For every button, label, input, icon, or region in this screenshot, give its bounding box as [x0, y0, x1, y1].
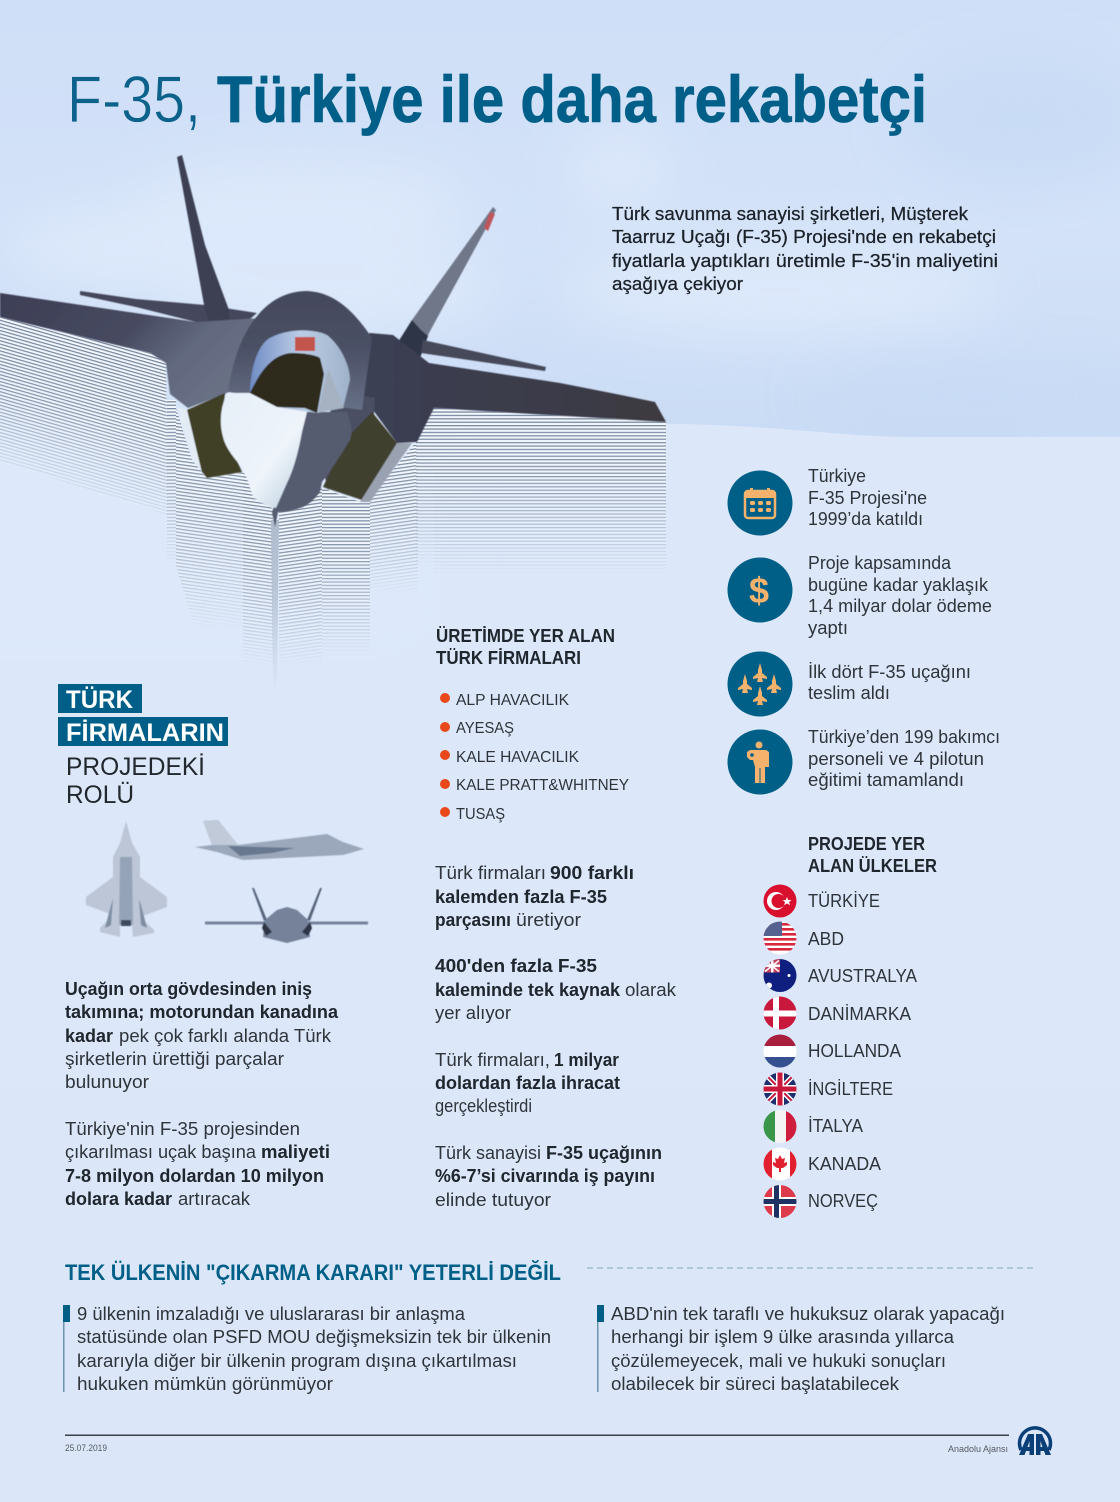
bottom right note: çözülemeyecek, mali ve hukuki sonuçları [611, 1351, 946, 1371]
left body text: şirketlerin ürettiği parçalar [65, 1049, 284, 1069]
pilot helmet red [295, 337, 315, 351]
intro paragraph: aşağıya çekiyor [612, 274, 743, 294]
middle body text [435, 863, 677, 1210]
left stabilizer [80, 291, 257, 323]
middle body text: Türk firmaları, [435, 1050, 550, 1070]
countries heading: PROJEDE YER [808, 834, 925, 854]
middle body text: kaleminde tek kaynak [435, 980, 621, 1000]
fact: payment: yaptı [808, 618, 848, 638]
icon: pilot [728, 730, 792, 794]
title: F-35, [67, 62, 201, 136]
icon: four jets [728, 652, 792, 716]
countries list: KANADA [808, 1154, 881, 1174]
middle body text: %6-7’si civarında iş payını [435, 1166, 655, 1186]
middle body text: 400'den fazla F-35 [435, 956, 597, 976]
flag: Turkey [763, 884, 797, 918]
right intake [323, 412, 397, 502]
companies list [436, 626, 629, 823]
bottom right note: ABD'nin tek taraflı ve hukuksuz olarak yapacağı [611, 1304, 1005, 1324]
middle body text: olarak [625, 980, 677, 1000]
fact: delivered: İlk dört F-35 uçağını [808, 662, 971, 682]
intro paragraph [612, 204, 998, 294]
companies items: KALE HAVACILIK [456, 749, 579, 766]
left body text [65, 979, 339, 1209]
fuselage underlay [316, 392, 375, 490]
bottom right note [597, 1304, 1005, 1394]
jet three views [86, 820, 368, 943]
section heading: role of Turkish companies: TÜRK [66, 685, 133, 714]
left body text: bulunuyor [65, 1072, 149, 1092]
top view [86, 821, 167, 937]
side view [195, 820, 364, 860]
fact: training: eğitimi tamamlandı [808, 770, 964, 790]
countries heading: ALAN ÜLKELER [808, 856, 937, 876]
left body text: çıkarılması uçak başına [65, 1142, 257, 1162]
right wing [345, 333, 666, 443]
jet speed line trails [0, 317, 666, 690]
middle body text: 900 farklı [550, 863, 634, 883]
countries list: İNGİLTERE [808, 1079, 893, 1099]
icon: dollar [728, 558, 792, 622]
left body text: 7-8 milyon dolardan 10 milyon [65, 1166, 324, 1186]
left body text: dolara kadar [65, 1189, 172, 1209]
left body text: artıracak [178, 1189, 251, 1209]
flag: Netherlands [763, 1034, 797, 1068]
intro paragraph: Türk savunma sanayisi şirketleri, Müşterek [612, 204, 969, 224]
middle body text: Türk sanayisi [435, 1143, 541, 1163]
bottom left note [63, 1304, 551, 1394]
right tail fin [395, 207, 496, 358]
flag: Norway [763, 1184, 797, 1218]
canopy dark glass [250, 353, 324, 413]
flag: Italy [763, 1110, 797, 1144]
title: Türkiye ile daha rekabetçi [217, 62, 927, 136]
section heading: role of Turkish companies: FİRMALARIN [66, 719, 224, 747]
fact: training: Türkiye’den 199 bakımcı [808, 727, 1000, 747]
companies heading: ÜRETİMDE YER ALAN [436, 626, 615, 646]
fact: joined in 1999: Türkiye [808, 466, 866, 486]
fact: delivered: teslim aldı [808, 683, 890, 703]
section heading: role of Turkish companies: ROLÜ [66, 781, 134, 809]
companies items: KALE PRATT&WHITNEY [456, 777, 629, 794]
middle body text: F-35 uçağının [546, 1143, 662, 1163]
icon: Anadolu Agency logo [1019, 1428, 1051, 1455]
fact list with icons [728, 466, 1000, 794]
middle body text: parçasını [435, 910, 511, 930]
left wing [0, 293, 285, 408]
companies items: ALP HAVACILIK [456, 692, 569, 709]
section heading: role of Turkish companies: PROJEDEKİ [66, 752, 205, 781]
icon: dollar: $ [749, 570, 769, 611]
canopy [250, 330, 350, 413]
bottom right note: herhangi bir işlem 9 ülke arasında yıllarca [611, 1327, 955, 1347]
fact: payment: bugüne kadar yaklaşık [808, 575, 989, 595]
middle body text: 1 milyar [554, 1050, 619, 1070]
countries heading [808, 834, 937, 876]
companies items: TUSAŞ [456, 806, 505, 823]
fact: training: personeli ve 4 pilotun [808, 749, 984, 769]
bottom left note: hukuken mümkün görünmüyor [77, 1374, 333, 1394]
left body text: maliyeti [261, 1142, 330, 1162]
companies heading [436, 626, 615, 668]
companies items: AYESAŞ [456, 720, 514, 737]
icon: calendar [728, 470, 792, 536]
middle body text: yer alıyor [435, 1003, 511, 1023]
countries list: ABD [808, 929, 844, 949]
left tail fin [177, 155, 229, 327]
flag: UK [763, 1072, 797, 1106]
jet photo illustration [0, 155, 666, 527]
companies heading: TÜRK FİRMALARI [436, 648, 581, 668]
left body text: Uçağın orta gövdesinden iniş [65, 979, 312, 999]
countries list: DANİMARKA [808, 1004, 911, 1024]
countries list: NORVEÇ [808, 1191, 878, 1211]
fact: joined in 1999: F-35 Projesi'ne [808, 488, 927, 508]
countries list: HOLLANDA [808, 1041, 901, 1061]
flag: Denmark [763, 996, 797, 1030]
fuselage dome [228, 291, 372, 410]
bottom section heading: TEK ÜLKENİN "ÇIKARMA KARARI" YETERLİ DEĞİL [65, 1260, 561, 1285]
bottom left note: 9 ülkenin imzaladığı ve uluslararası bir anlaşma [77, 1304, 466, 1324]
fact: payment [808, 553, 992, 638]
fact: delivered [808, 662, 971, 703]
countries list: İTALYA [808, 1116, 863, 1136]
footer: Anadolu Ajansı [948, 1444, 1008, 1454]
fact: joined in 1999: 1999’da katıldı [808, 509, 923, 529]
flag: USA [763, 921, 797, 955]
middle body text: kalemden fazla F-35 [435, 887, 607, 907]
left body text: kadar [65, 1026, 113, 1046]
left body text: pek çok farklı alanda Türk [119, 1026, 332, 1046]
intro paragraph: fiyatlarla yaptıkları üretimle F-35'in maliyetini [612, 251, 998, 271]
countries list: AVUSTRALYA [808, 966, 917, 986]
footer: 25.07.2019 [65, 1443, 107, 1453]
fact: training [808, 727, 1000, 790]
left body text: Türkiye'nin F-35 projesinden [65, 1119, 300, 1139]
footer [65, 1428, 1051, 1455]
flag: Australia [763, 958, 797, 992]
countries list [763, 834, 937, 1218]
middle body text: elinde tutuyor [435, 1190, 551, 1210]
left body text: takımına; motorundan kanadına [65, 1002, 339, 1022]
companies items [440, 692, 629, 823]
bottom left note: kararıyla diğer bir ülkenin program dışına çıkartılması [77, 1351, 517, 1371]
countries list: TÜRKİYE [808, 891, 880, 911]
bottom right note: olabilecek bir süreci başlatabilecek [611, 1374, 900, 1394]
radome dark side [272, 412, 351, 527]
right stabilizer [421, 340, 546, 371]
left intake [187, 393, 242, 478]
middle body text: Türk firmaları [435, 863, 546, 883]
front view [205, 888, 368, 943]
middle body text: üretiyor [516, 910, 581, 930]
flag: Canada [763, 1147, 797, 1181]
canopy right frame [318, 368, 344, 412]
section heading: role of Turkish companies [58, 684, 228, 809]
intro paragraph: Taarruz Uçağı (F-35) Projesi'nde en rekabetçi [612, 227, 996, 247]
fact: joined in 1999 [808, 466, 927, 529]
fact: payment: 1,4 milyar dolar ödeme [808, 596, 992, 616]
middle body text: dolardan fazla ihracat [435, 1073, 620, 1093]
background sky and clouds [0, 0, 1120, 437]
middle body text: gerçekleştirdi [435, 1096, 532, 1116]
fact: payment: Proje kapsamında [808, 553, 952, 573]
white nose [221, 393, 307, 508]
bottom left note: statüsünde olan PSFD MOU değişmeksizin tek bir ülkenin [77, 1327, 551, 1347]
